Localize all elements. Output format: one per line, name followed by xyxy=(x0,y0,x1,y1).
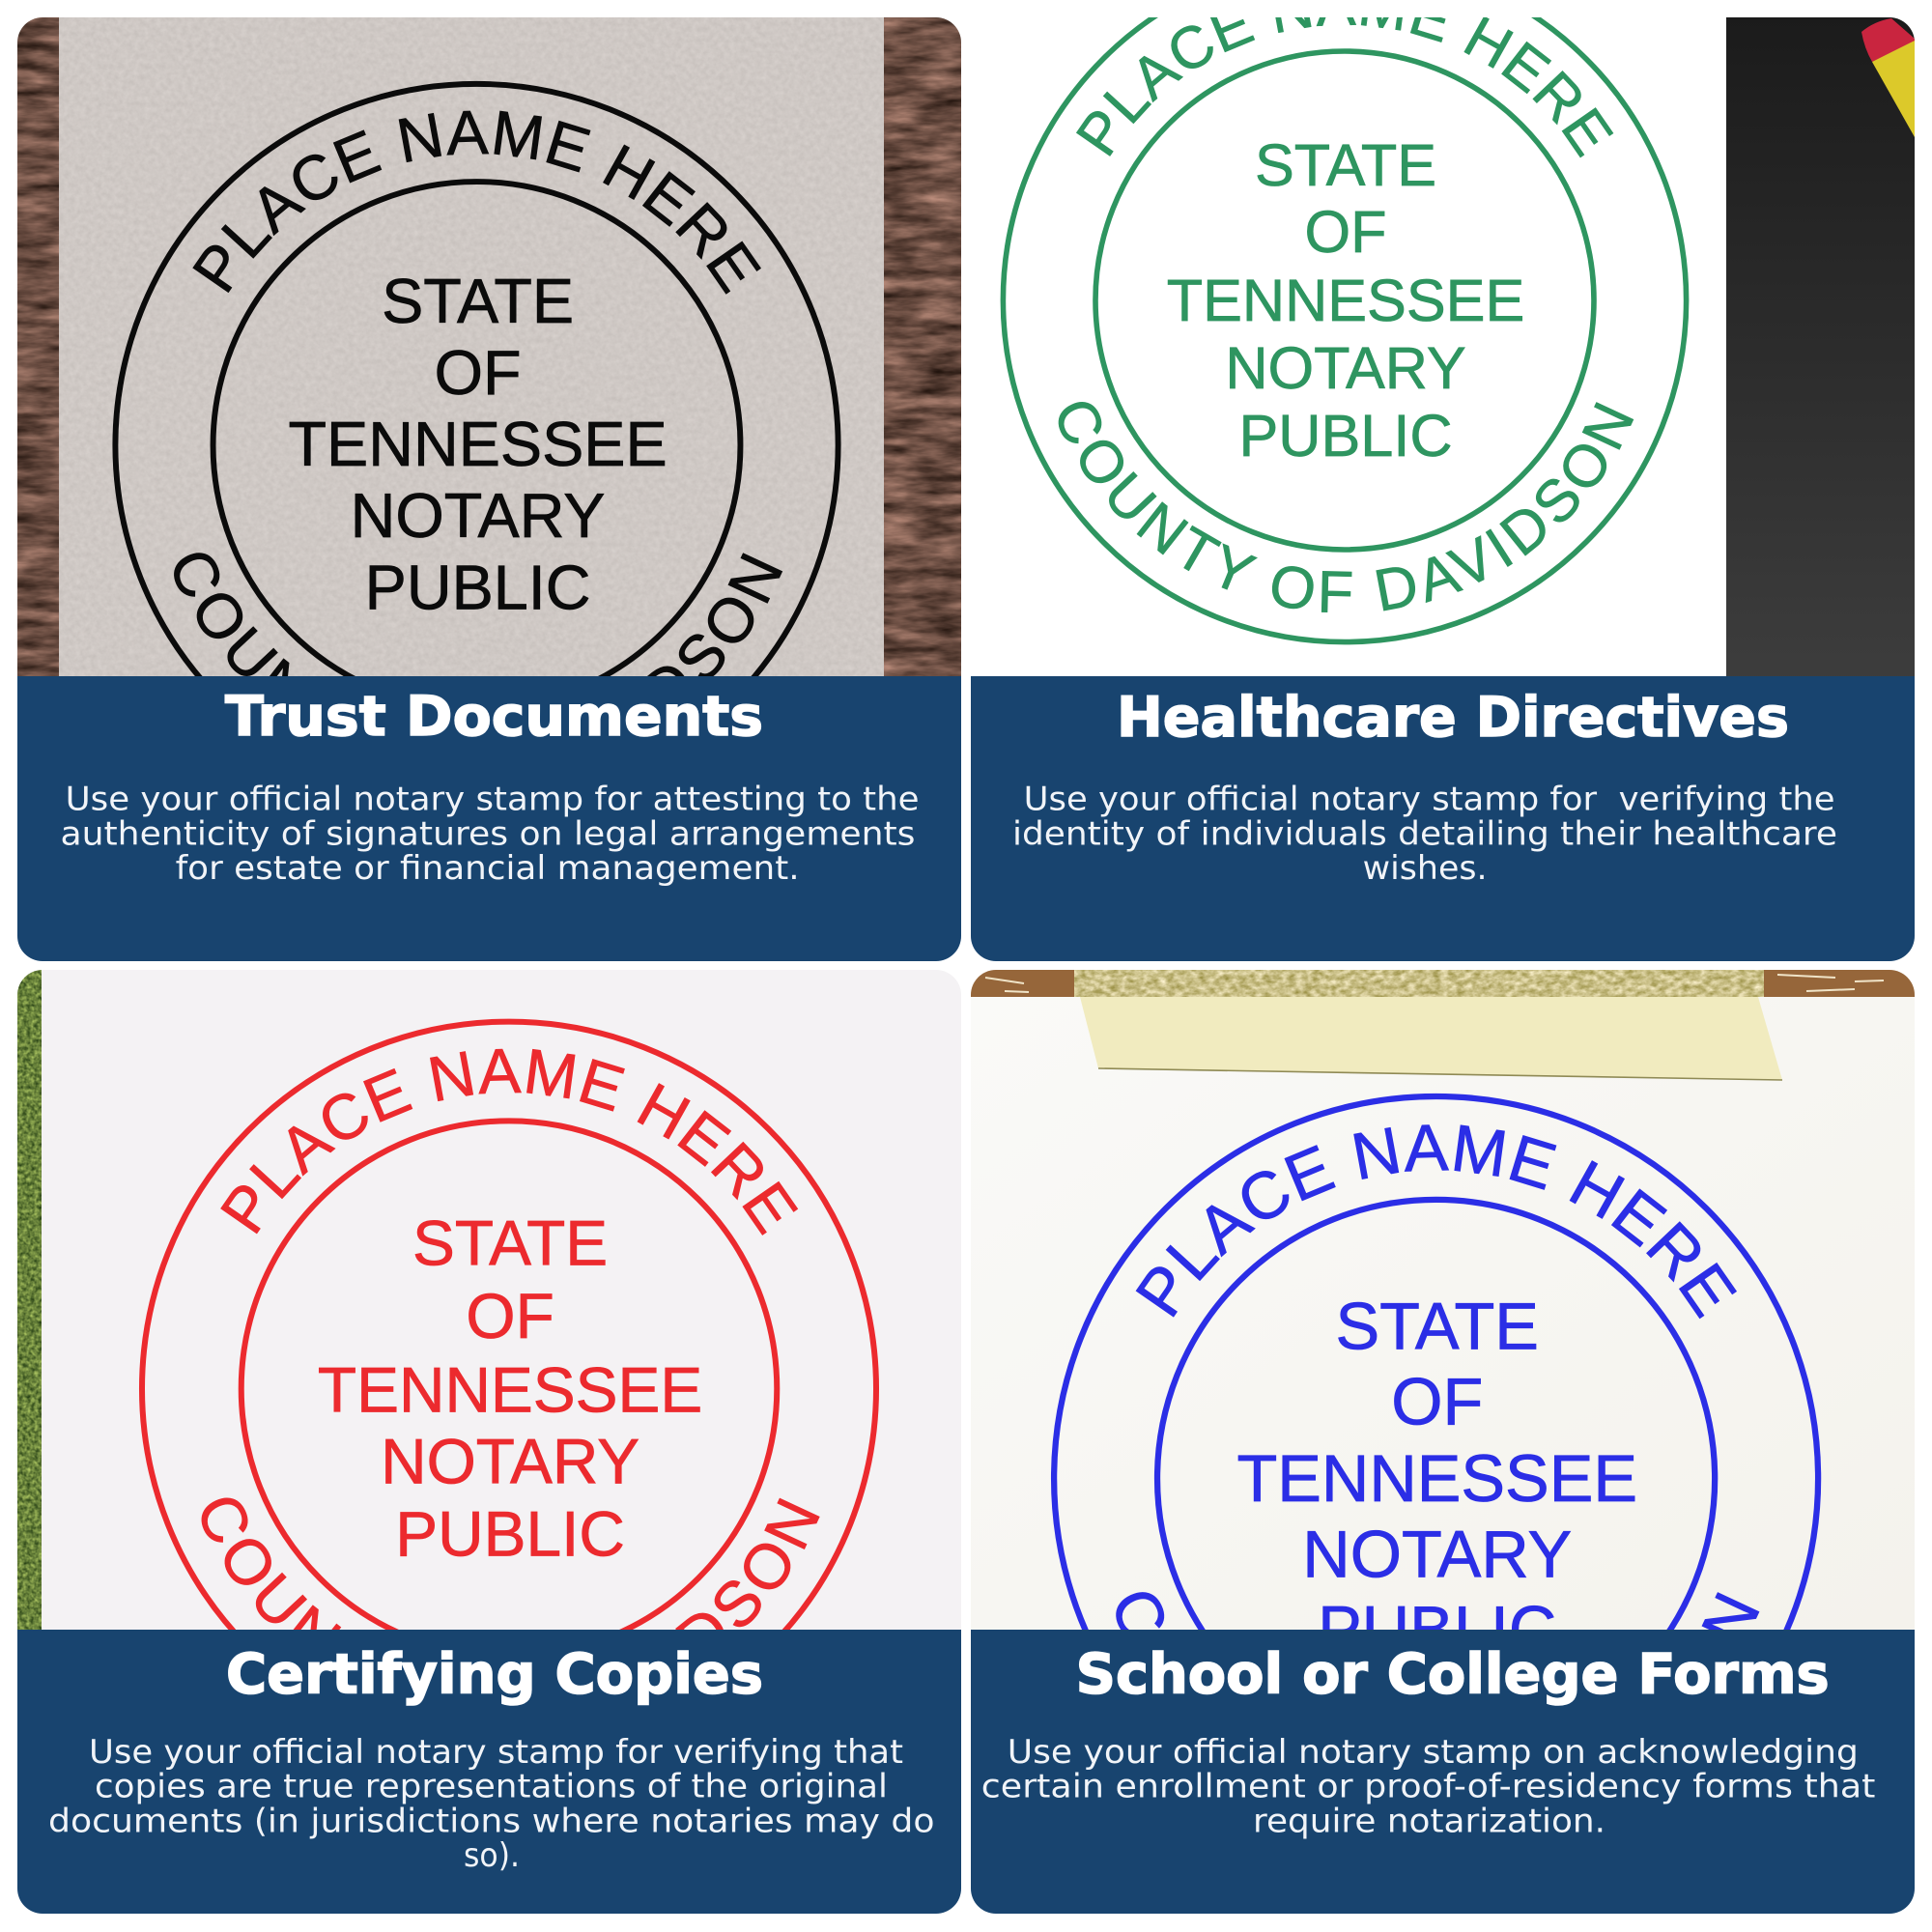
caption band xyxy=(17,1630,961,1914)
panel: Healthcare Directives xyxy=(971,17,1915,961)
heading: Trust Documents xyxy=(225,685,763,749)
panel: Trust Documents xyxy=(17,17,961,961)
description: Use your official notary stamp for verifying the xyxy=(1024,781,1835,819)
stamp impression: green: OF xyxy=(1305,199,1386,265)
stamp impression: black: PLACE NAME HERE xyxy=(192,110,761,295)
stamp impression: black: TENNESSEE xyxy=(289,409,668,479)
caption band xyxy=(17,676,961,961)
description: identity of individuals detailing their healthcare xyxy=(1012,815,1837,854)
description: Use your official notary stamp for attesting to the xyxy=(66,781,920,819)
photo: green backing edge xyxy=(17,970,42,1636)
stamp impression: red xyxy=(139,1018,879,1630)
stamp impression: black: OF xyxy=(435,337,522,408)
description: require notarization. xyxy=(1253,1803,1605,1841)
stamp impression: blue: OF xyxy=(1391,1365,1483,1439)
description: Use your official notary stamp on acknowledging xyxy=(1008,1733,1859,1772)
stamp impression: blue: TENNESSEE xyxy=(1236,1441,1637,1516)
photo: dark desk xyxy=(1726,17,1915,684)
panel: School or College Forms xyxy=(971,970,1915,1914)
stamp impression: red: STATE xyxy=(412,1208,608,1279)
description xyxy=(981,1733,1875,1841)
photo: white sheet xyxy=(971,970,1915,1636)
stamp impression: blue: STATE xyxy=(1336,1289,1539,1363)
stamp impression: black: COUNTY OF DAVIDSON xyxy=(174,553,782,676)
description: so). xyxy=(464,1836,520,1875)
stamp impression: blue: PUBLIC xyxy=(1318,1593,1556,1667)
stamp impression: green: PUBLIC xyxy=(1238,403,1453,469)
caption band xyxy=(971,1630,1915,1914)
stamp impression: black: STATE xyxy=(382,266,574,336)
stamp impression: green: STATE xyxy=(1255,132,1436,198)
description xyxy=(48,1733,934,1875)
description: documents (in jurisdictions where notaries may do xyxy=(48,1803,934,1841)
description xyxy=(1015,784,1835,879)
photo: white sheet xyxy=(971,17,1727,684)
stamp impression: red: PLACE NAME HERE xyxy=(220,1049,798,1236)
stamp impression: red: OF xyxy=(466,1280,554,1351)
stamp impression: red: COUNTY OF DAVIDSON xyxy=(201,1497,820,1630)
heading: Healthcare Directives xyxy=(1117,686,1789,750)
photo: masking tape xyxy=(1074,970,1782,1080)
stamp impression: blue: COUNTY OF DAVIDSON xyxy=(1116,1592,1760,1630)
stamp impression: black: NOTARY xyxy=(351,480,605,551)
stamp impression: red: NOTARY xyxy=(381,1425,639,1496)
description: for estate or financial management. xyxy=(176,849,800,888)
caption band xyxy=(971,676,1915,961)
description: copies are true representations of the original xyxy=(95,1768,888,1806)
description xyxy=(60,781,920,888)
stamp impression: blue: NOTARY xyxy=(1302,1517,1572,1591)
stamp impression: blue xyxy=(1051,1094,1822,1630)
icon: pencil end xyxy=(1861,18,1915,137)
stamp impression: green xyxy=(1001,17,1689,645)
stamp impression: green: COUNTY OF DAVIDSON xyxy=(1059,402,1634,612)
description: wishes. xyxy=(1363,849,1488,888)
photo: paper sheet xyxy=(59,17,884,684)
panel: Certifying Copies xyxy=(17,970,961,1914)
stamp impression: black xyxy=(112,81,841,676)
heading: Certifying Copies xyxy=(226,1643,763,1707)
stamp impression: blue: PLACE NAME HERE xyxy=(1136,1124,1737,1320)
description: certain enrollment or proof-of-residency forms that xyxy=(981,1768,1875,1806)
description: authenticity of signatures on legal arrangements xyxy=(60,815,916,854)
stamp impression: green: NOTARY xyxy=(1225,335,1466,401)
photo: white sheet xyxy=(17,970,961,1636)
stamp impression: red: PUBLIC xyxy=(395,1498,625,1570)
stamp impression: red: TENNESSEE xyxy=(318,1353,702,1425)
stamp impression: green: TENNESSEE xyxy=(1167,268,1524,333)
stamp impression: black: PUBLIC xyxy=(365,552,590,622)
heading: School or College Forms xyxy=(1076,1643,1830,1707)
description: Use your official notary stamp for verifying that xyxy=(89,1733,903,1772)
photo: brown clipboard edge xyxy=(971,970,1915,997)
photo: wood background xyxy=(17,17,961,684)
